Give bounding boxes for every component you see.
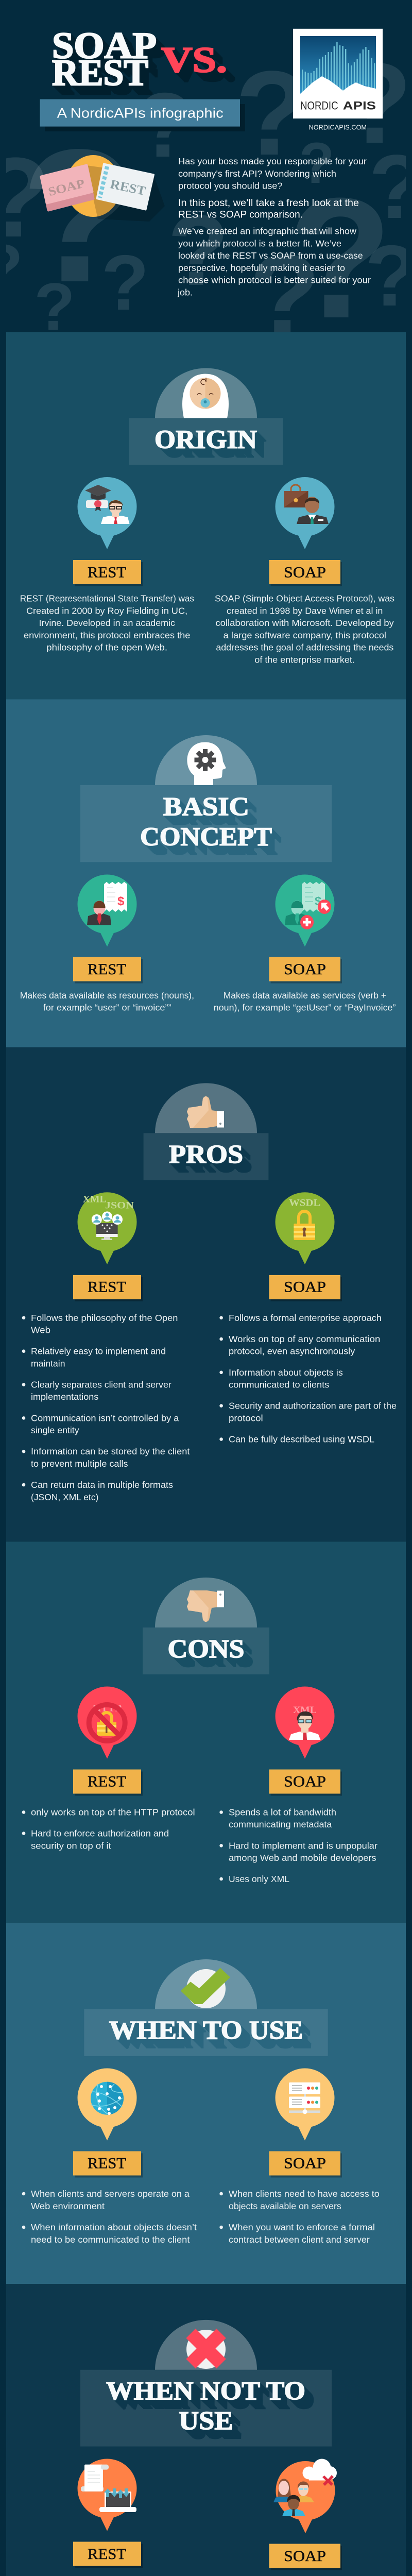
text: REST origin: environment, this protocol embraces the <box>24 630 190 640</box>
logo: Nordic APIs: APIS <box>343 99 376 112</box>
text: ? <box>101 239 149 327</box>
label: SOAP <box>269 957 342 984</box>
logo: Nordic APIs <box>293 29 383 118</box>
pin: REST HTTP only: HTTP <box>93 1703 122 1714</box>
list: SOAP when to use: objects available on servers <box>229 2201 341 2211</box>
intro text <box>177 156 371 297</box>
pin: SOAP XML developer: XML <box>293 1705 317 1716</box>
label: REST <box>73 1769 143 1796</box>
label: SOAP <box>269 2151 342 2177</box>
list: REST pros: Communication isn’t controlled by a <box>31 1413 179 1423</box>
intro text: choose which protocol is better suited for your <box>178 275 371 285</box>
list: SOAP pros: Can be fully described using WSDL <box>229 1434 374 1445</box>
list: SOAP when to use: When you want to enforce a formal <box>229 2222 375 2232</box>
label: SOAP: SOAP <box>284 961 326 978</box>
list: REST when to use: Web environment <box>31 2201 105 2211</box>
list: SOAP pros: communicated to clients <box>229 1380 330 1390</box>
text: SOAP origin: collaboration with Microsoft. Developed by <box>215 618 394 628</box>
icon: cross mark <box>155 2320 257 2370</box>
icon: soap and pillow: REST <box>109 177 147 198</box>
list: SOAP when to use: contract between client and server <box>229 2234 370 2245</box>
section title plate <box>143 1628 269 1674</box>
logo caption: NORDICAPIS.COM <box>309 124 367 131</box>
text: ? <box>21 110 136 321</box>
icon: baby <box>155 368 257 418</box>
list: REST when to use <box>22 2189 197 2245</box>
icon: check mark <box>155 1959 257 2009</box>
title: VS. <box>161 41 227 80</box>
list: SOAP pros: protocol, even asynchronously <box>229 1346 355 1357</box>
text: REST origin: Created in 2000 by Roy Fielding in UC, <box>26 605 187 616</box>
label: SOAP: SOAP <box>284 2548 326 2565</box>
list: SOAP when to use: When clients need to have access to <box>229 2189 380 2199</box>
list: SOAP pros: Works on top of any communication <box>229 1334 380 1344</box>
panel: basic concept <box>6 699 406 1047</box>
list: REST pros <box>22 1313 190 1502</box>
list: REST pros: Web <box>31 1325 50 1335</box>
list: REST cons: Hard to enforce authorization and <box>31 1828 169 1839</box>
list: SOAP pros: protocol <box>229 1413 263 1423</box>
list: REST cons: security on top of it <box>31 1840 111 1851</box>
list: SOAP when to use <box>219 2189 380 2245</box>
section title plate <box>80 785 332 862</box>
pin: SOAP security: WSDL <box>289 1197 320 1208</box>
heading <box>106 2377 305 2436</box>
text: REST origin: Irvine. Developed in an academic <box>39 618 175 628</box>
text: ? <box>137 74 193 176</box>
list: REST pros: to prevent multiple calls <box>31 1459 128 1469</box>
label: REST: REST <box>88 2546 126 2563</box>
list: REST when to use: When clients and servers operate on a <box>31 2189 190 2199</box>
pin: REST formats: JSON <box>105 1200 134 1211</box>
pin: SOAP service: $ <box>315 894 322 908</box>
panel: origin <box>6 332 406 700</box>
title <box>52 25 227 93</box>
label: SOAP: SOAP <box>284 1773 326 1790</box>
title: SOAP <box>52 25 157 66</box>
pin: REST contract <box>77 2459 137 2531</box>
heading: WHEN TO USE <box>109 2016 303 2045</box>
label: REST <box>73 2151 143 2177</box>
text: ? <box>287 162 392 354</box>
panel: when not to use <box>6 2284 406 2576</box>
list: REST pros: (JSON, XML etc) <box>31 1492 98 1502</box>
title: REST <box>52 52 148 93</box>
heading: CONCEPT <box>140 823 272 852</box>
label: SOAP: SOAP <box>284 1279 326 1296</box>
text: ? <box>299 131 334 195</box>
label: REST: REST <box>88 1279 126 1296</box>
pin: REST academic <box>77 477 137 549</box>
list: SOAP pros: Security and authorization are part of the <box>229 1401 397 1411</box>
list: SOAP cons: Hard to implement and is unpopular <box>229 1840 377 1851</box>
text: SOAP origin: addresses the goal of addressing the needs <box>216 642 394 652</box>
text: REST origin: philosophy of the open Web. <box>46 642 167 652</box>
list: REST pros: Relatively easy to implement and <box>31 1346 166 1357</box>
heading: PROS <box>169 1140 243 1169</box>
text: REST concept <box>20 990 194 1013</box>
subtitle banner: A NordicAPIs infographic <box>57 105 224 121</box>
list: REST pros: implementations <box>31 1392 99 1402</box>
icon: soap and pillow: SOAP <box>47 177 86 199</box>
text: ? <box>34 269 75 344</box>
pin: SOAP service <box>275 875 335 947</box>
list: SOAP cons <box>219 1807 377 1884</box>
icon: thumbs down <box>155 1578 257 1628</box>
label: SOAP <box>269 2544 342 2570</box>
list: SOAP pros <box>219 1313 397 1445</box>
list: REST pros: Information can be stored by the client <box>31 1446 190 1456</box>
panel: when to use <box>6 1923 406 2284</box>
text: SOAP origin: created in 1998 by Dave Winer et al in <box>227 605 383 616</box>
list: REST pros: single entity <box>31 1425 79 1435</box>
section title plate <box>129 418 283 465</box>
label: SOAP <box>269 560 342 586</box>
list: REST when to use: need to be communicated to the client <box>31 2234 190 2245</box>
text: ? <box>235 46 308 180</box>
intro text: We’ve created an infographic that will show <box>178 226 356 236</box>
text: SOAP concept: Makes data available as services (verb + <box>224 990 386 1001</box>
label: SOAP <box>269 1769 342 1796</box>
text: SOAP origin <box>215 594 394 665</box>
intro text: In this post, we’ll take a fresh look at the <box>178 197 359 209</box>
label: REST <box>73 957 143 984</box>
heading: WHEN NOT TO <box>106 2377 305 2406</box>
intro text: Has your boss made you responsible for your <box>178 156 367 166</box>
pin: REST formats: XML <box>83 1194 107 1205</box>
intro text: perspective, hopefully making it easier to <box>178 263 345 273</box>
list: REST cons <box>22 1807 195 1851</box>
label: REST: REST <box>88 961 126 978</box>
list: SOAP cons: Spends a lot of bandwidth <box>229 1807 336 1818</box>
label: REST: REST <box>88 2155 126 2172</box>
pin: SOAP developers and cloud <box>273 2459 337 2533</box>
label: SOAP <box>269 1275 342 1301</box>
icon: head with gear <box>155 735 257 785</box>
list: SOAP cons: among Web and mobile developers <box>229 1853 376 1863</box>
intro text: you which protocol is a better fit. We’ve <box>178 238 341 248</box>
pin: SOAP security <box>275 1192 335 1264</box>
label: REST: REST <box>88 564 126 581</box>
list: REST pros: Follows the philosophy of the Open <box>31 1313 178 1323</box>
list: REST pros: maintain <box>31 1358 65 1368</box>
pin: REST HTTP only <box>77 1687 137 1759</box>
pin: REST formats <box>77 1192 137 1264</box>
pin: REST web <box>77 2068 137 2141</box>
heading: CONS <box>168 1635 244 1664</box>
label: REST <box>73 560 143 586</box>
pin: REST resource <box>77 875 137 947</box>
heading: USE <box>179 2407 233 2436</box>
section title plate <box>84 2009 328 2056</box>
text: ? <box>167 194 229 307</box>
text: REST origin: REST (Representational State Transfer) was <box>20 594 194 604</box>
pin: SOAP XML developer <box>275 1687 335 1759</box>
intro text: looked at the REST vs SOAP from a use-case <box>178 250 363 261</box>
list: SOAP cons: Uses only XML <box>229 1874 289 1884</box>
label: SOAP: SOAP <box>284 2155 326 2172</box>
list: REST when to use: When information about objects doesn’t <box>31 2222 197 2232</box>
label: SOAP: SOAP <box>284 564 326 581</box>
heading <box>140 792 272 852</box>
text: REST origin <box>20 594 194 652</box>
text: ? <box>249 230 320 360</box>
intro text: job. <box>177 287 193 297</box>
list: SOAP cons: communicating metadata <box>229 1819 332 1829</box>
subtitle banner <box>40 99 245 131</box>
list: REST pros: Can return data in multiple formats <box>31 1480 173 1490</box>
list: SOAP pros: Information about objects is <box>229 1367 343 1378</box>
list: REST pros: Clearly separates client and server <box>31 1380 171 1390</box>
heading: BASIC <box>163 792 249 821</box>
label: REST: REST <box>88 1773 126 1790</box>
text: SOAP concept: noun), for example “getUser” or “PayInvoice” <box>214 1003 396 1013</box>
text: ? <box>342 40 412 167</box>
section title plate <box>80 2370 332 2446</box>
logo: Nordic APIs: NORDIC <box>300 99 338 112</box>
panel: cons <box>6 1541 406 1923</box>
pin: SOAP server <box>275 2068 335 2141</box>
section title plate <box>144 1133 268 1180</box>
icon: thumbs up <box>155 1083 257 1133</box>
intro text: company's first API? Wondering which <box>178 168 336 179</box>
panel: pros <box>6 1047 406 1541</box>
label: REST <box>73 2542 143 2568</box>
text: SOAP origin: of the enterprise market. <box>254 654 355 665</box>
text: SOAP origin: a large software company, this protocol <box>224 630 386 640</box>
pin: SOAP business <box>275 477 335 549</box>
intro text: REST vs SOAP comparison. <box>178 209 303 220</box>
list: REST cons: only works on top of the HTTP protocol <box>31 1807 195 1818</box>
label: REST <box>73 1275 143 1301</box>
pin: REST resource: $ <box>117 894 125 908</box>
list: SOAP pros: Follows a formal enterprise approach <box>229 1313 382 1323</box>
text: SOAP origin: SOAP (Simple Object Access Protocol), was <box>215 594 394 604</box>
icon: soap and pillow <box>41 155 165 222</box>
text: SOAP concept <box>214 990 396 1013</box>
heading: ORIGIN <box>154 426 257 454</box>
text: REST concept: Makes data available as resources (nouns), <box>20 990 194 1001</box>
intro text: protocol you should use? <box>178 180 283 191</box>
text: REST concept: for example “user” or “invoice”” <box>43 1003 171 1013</box>
